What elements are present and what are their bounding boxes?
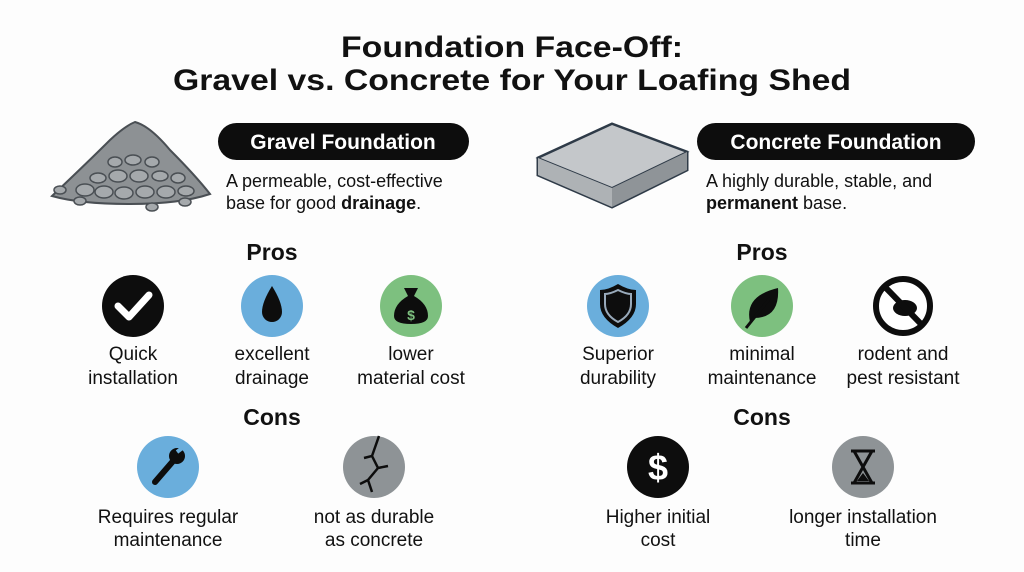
labels: concrete pros: Superior [582,344,655,365]
labels: concrete pros: pest resistant [846,368,960,389]
heading: concrete foundation: Concrete Foundation [730,131,942,154]
text: gravel description: base for good drainage. [226,193,421,213]
heading: gravel pros: Pros [246,239,298,265]
labels: gravel pros: lower [388,344,434,365]
icon: checkmark [102,275,164,337]
labels: concrete cons: cost [641,530,676,551]
labels: concrete cons: time [845,530,881,551]
text: gravel description [226,171,443,213]
text: gravel description: A permeable, cost-effective [226,171,443,191]
icon: no rodents [876,279,930,333]
heading: concrete cons: Cons [733,404,791,430]
icon: wrench [137,436,199,498]
labels: gravel pros [88,344,466,389]
labels: concrete pros: rodent and [858,344,948,365]
icon: gravel pile [52,122,210,211]
text: concrete description [706,171,932,213]
heading: gravel cons: Cons [243,404,301,430]
labels: gravel pros: Quick [109,344,158,365]
labels: gravel pros: installation [88,368,178,389]
title [173,31,851,97]
labels: concrete cons: longer installation [789,507,937,528]
labels: gravel cons: not as durable [314,507,434,528]
labels: gravel cons: Requires regular [98,507,239,528]
icon: dollar [627,436,689,498]
title: Foundation Face-Off: [341,31,683,64]
heading: concrete foundation [697,123,975,160]
icon: water drop [241,275,303,337]
heading: concrete pros: Pros [736,239,788,265]
title: Gravel vs. Concrete for Your Loafing Shed [173,64,851,97]
icon: concrete slab [538,124,687,207]
labels: concrete pros [580,344,960,389]
heading: gravel foundation [218,123,469,160]
text: concrete description: A highly durable, stable, and [706,171,932,191]
labels: concrete cons [606,507,937,551]
icon: shield [587,275,649,337]
icon: dollar: $ [648,447,668,488]
labels: gravel cons [98,507,434,551]
labels: concrete pros: durability [580,368,657,389]
icon: leaf [731,275,793,337]
labels: gravel cons: maintenance [114,530,222,551]
heading: gravel foundation: Gravel Foundation [250,131,436,154]
labels: gravel pros: excellent [234,344,310,365]
labels: gravel pros: material cost [357,368,466,389]
icon: crack [343,436,405,498]
labels: concrete pros: maintenance [708,368,816,389]
labels: gravel pros: drainage [235,368,309,389]
text: concrete description: permanent base. [706,193,847,213]
labels: gravel cons: as concrete [325,530,423,551]
icon: hourglass [832,436,894,498]
icon: money bag: $ [407,307,415,323]
icon: money bag [380,275,442,337]
labels: concrete pros: minimal [729,344,795,365]
labels: concrete cons: Higher initial [606,507,710,528]
